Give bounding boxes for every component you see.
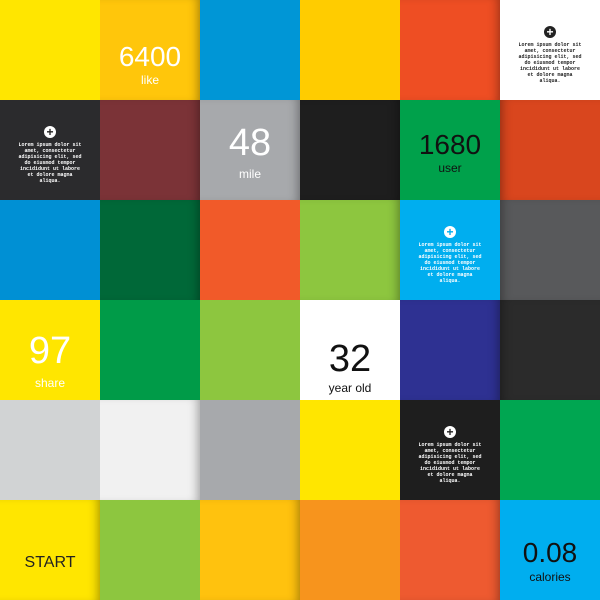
note tile dark xyxy=(0,100,100,200)
tile: 1680 user: user xyxy=(438,161,462,175)
note tile blue: + xyxy=(446,225,454,239)
note tile top right: + xyxy=(546,25,554,39)
note tile black xyxy=(400,400,500,500)
tile: 0.08 calories xyxy=(500,500,600,600)
tile: 48 mile xyxy=(200,100,300,200)
tile: 48 mile: 48 xyxy=(229,122,271,164)
note tile black: Lorem ipsum dolor sit amet, consectetur adipisicing elit, sed do eiusmod tempor incididunt ut labore et dolore magna aliqua. xyxy=(418,442,482,484)
row 0 xyxy=(0,0,100,100)
tile: 1680 user xyxy=(400,100,500,200)
note tile top right: Lorem ipsum dolor sit amet, consectetur adipisicing elit, sed do eiusmod tempor incididunt ut labore et dolore magna aliqua. xyxy=(518,42,582,84)
note tile blue xyxy=(400,200,500,300)
tile: 6400 like: like xyxy=(141,73,159,87)
tile: 32 year old xyxy=(300,300,400,400)
tile: 6400 like: 6400 xyxy=(119,41,181,72)
row 2 xyxy=(0,200,100,300)
tile: 97 share xyxy=(0,300,100,400)
row 4 xyxy=(0,400,100,500)
note tile dark: + xyxy=(46,125,54,139)
tile: 1680 user: 1680 xyxy=(419,129,481,160)
tile: START xyxy=(0,500,100,600)
tile: START: START xyxy=(25,554,75,571)
tile: 48 mile: mile xyxy=(239,167,261,181)
note tile dark: Lorem ipsum dolor sit amet, consectetur adipisicing elit, sed do eiusmod tempor incididunt ut labore et dolore magna aliqua. xyxy=(18,142,82,184)
tile: 97 share: share xyxy=(35,376,65,390)
note tile top right xyxy=(500,0,600,100)
tile: 97 share: 97 xyxy=(29,330,71,372)
tile: 0.08 calories: calories xyxy=(529,570,571,584)
note tile blue: Lorem ipsum dolor sit amet, consectetur adipisicing elit, sed do eiusmod tempor incididunt ut labore et dolore magna aliqua. xyxy=(418,242,482,284)
tile: 0.08 calories: 0.08 xyxy=(523,537,577,568)
tile: 6400 like xyxy=(100,0,200,100)
tile: 32 year old: year old xyxy=(329,381,371,395)
note tile black: + xyxy=(446,425,454,439)
tile: 32 year old: 32 xyxy=(329,338,371,380)
